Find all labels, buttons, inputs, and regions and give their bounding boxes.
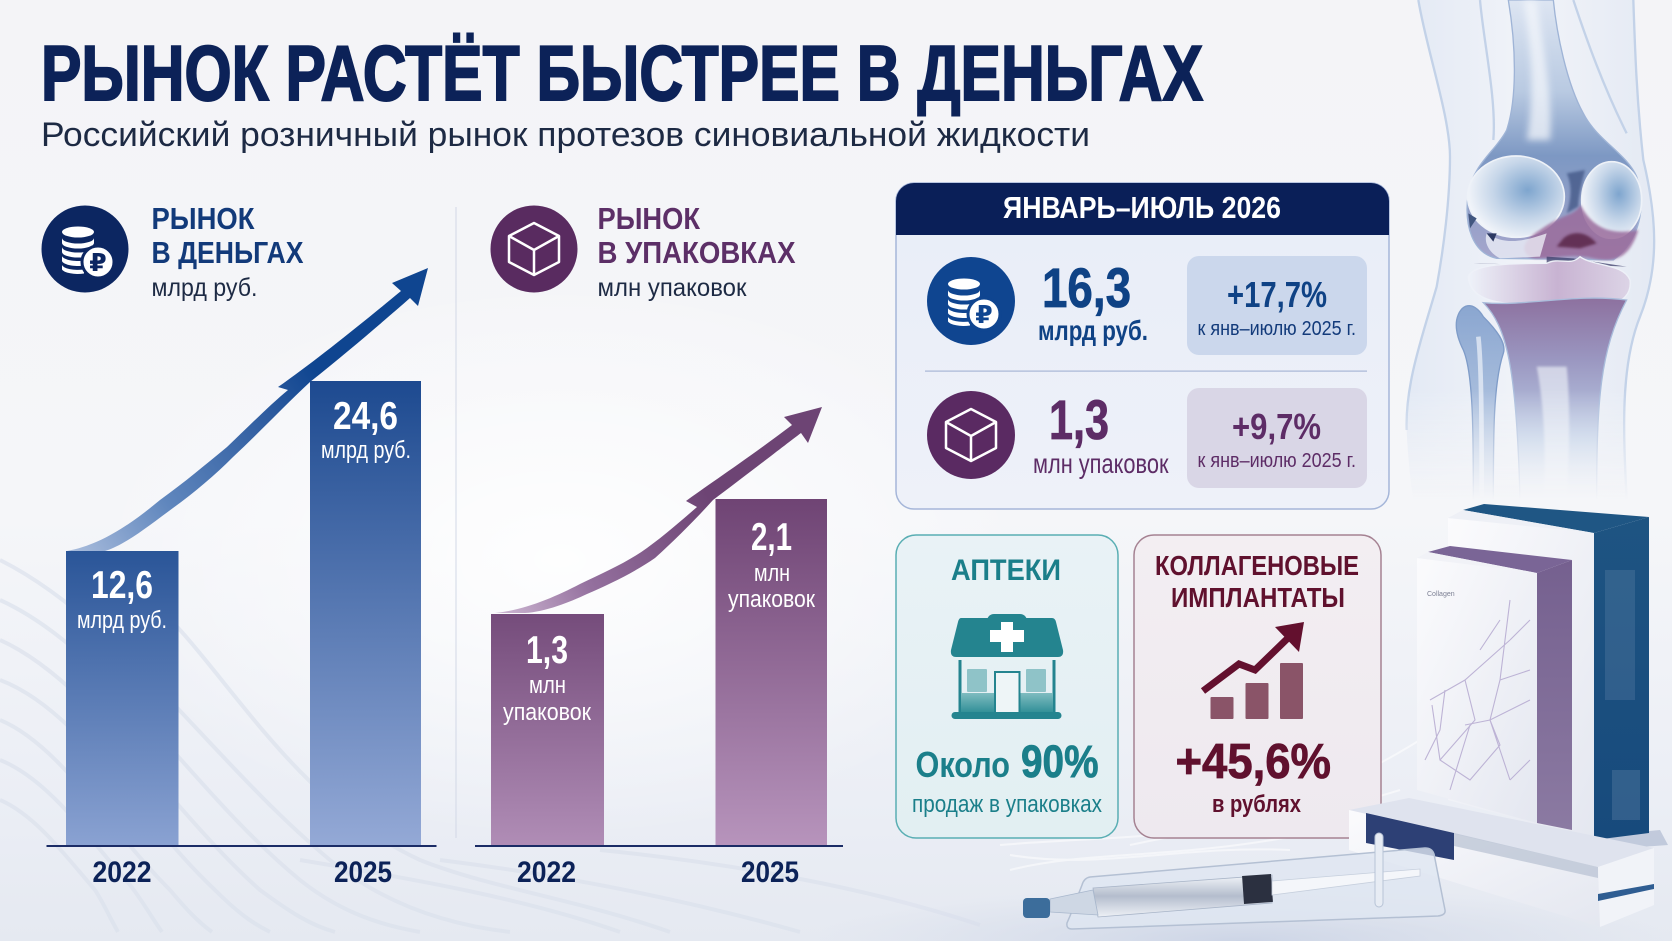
- panel: money market chart: [42, 201, 436, 889]
- axis: money: [46, 845, 436, 847]
- bar: 2025 money: млрд руб.: [321, 437, 411, 464]
- purple box: [1417, 546, 1572, 830]
- bar: 2025 packages: упаковок: [728, 586, 815, 613]
- year labels: money: [92, 856, 392, 889]
- chart icon: rising bars and arrow: [1203, 622, 1304, 719]
- metric: 1.3 mln packages: 1,3: [1049, 388, 1109, 451]
- bar: 2022 packages: 1,3: [526, 629, 568, 672]
- axis: packages: [475, 845, 843, 847]
- blue box: [1448, 504, 1668, 850]
- bar: 2022 money: [66, 551, 178, 846]
- callout: +17.7%: +17,7%: [1227, 274, 1327, 315]
- metric: 1.3 mln packages: [1033, 388, 1169, 479]
- icon: coins and ruble: [927, 257, 1015, 345]
- heading: packages market: РЫНОК: [598, 201, 700, 236]
- bar: 2022 packages: млн: [529, 672, 566, 699]
- callout: +9.7%: [1187, 388, 1367, 488]
- panel: packages market chart: [475, 201, 843, 889]
- heading: money market: [152, 201, 304, 302]
- metric: 16.3 bn rub: 16,3: [1042, 256, 1131, 319]
- metric: about 90%: 90%: [1021, 736, 1098, 787]
- year labels: packages: 2025: [741, 856, 799, 889]
- callout: +9.7%: к янв–июлю 2025 г.: [1198, 450, 1356, 472]
- bar: 2022 packages: [491, 614, 604, 846]
- icon: box: [490, 206, 578, 292]
- year labels: packages: 2022: [517, 856, 576, 889]
- bar: 2022 money: млрд руб.: [77, 607, 167, 634]
- caption: in rubles: в рублях: [1212, 791, 1302, 818]
- metric: +45.6%: +45,6%: [1176, 735, 1331, 789]
- heading: money market: млрд руб.: [152, 274, 258, 302]
- illustration: product boxes and syringe: [1023, 504, 1668, 929]
- year labels: packages: [517, 856, 799, 889]
- heading: collagen implants: [1155, 550, 1359, 613]
- panel: January-July 2026: [896, 183, 1389, 509]
- heading: packages market: [598, 201, 796, 302]
- panel header: [896, 183, 1389, 235]
- arrow: money growth: [67, 268, 428, 551]
- callout: +17.7%: к янв–июлю 2025 г.: [1198, 318, 1356, 340]
- bar: 2025 packages: 2,1: [751, 516, 792, 559]
- year labels: money: 2025: [334, 856, 392, 889]
- panel: pharmacies: [896, 535, 1118, 838]
- lying box: [1349, 798, 1654, 927]
- callout: +9.7%: +9,7%: [1232, 406, 1321, 447]
- title: РЫНОК РАСТЁТ БЫСТРЕЕ В ДЕНЬГАХ: [41, 29, 1203, 117]
- heading: pharmacies: АПТЕКИ: [951, 554, 1061, 587]
- heading: money market: В ДЕНЬГАХ: [152, 235, 304, 270]
- heading: packages market: млн упаковок: [598, 274, 748, 302]
- purple box: Collagen: [1427, 591, 1455, 598]
- bar: 2025 money: 24,6: [333, 395, 398, 438]
- metric: 16.3 bn rub: [1038, 256, 1148, 346]
- panel: collagen implants: [1134, 535, 1381, 838]
- icon: coins and ruble: [42, 206, 128, 292]
- panel header: ЯНВАРЬ–ИЮЛЬ 2026: [1003, 190, 1281, 225]
- bar: 2025 money: [310, 381, 421, 846]
- heading: money market: РЫНОК: [152, 201, 255, 236]
- metric: 1.3 mln packages: млн упаковок: [1033, 448, 1169, 479]
- background: [0, 514, 1672, 941]
- subtitle: Российский розничный рынок протезов синовиальной жидкости: [41, 116, 1090, 154]
- callout: +17.7%: [1187, 256, 1367, 355]
- bar: 2025 packages: [716, 499, 827, 846]
- syringe in blister: [1023, 833, 1445, 929]
- icon: box: [927, 391, 1015, 479]
- bar: 2022 packages: упаковок: [503, 699, 591, 726]
- metric: about 90%: Около: [916, 744, 1010, 785]
- icon: coins and ruble: ₽: [975, 301, 993, 329]
- icon: pharmacy: [951, 614, 1063, 719]
- bar: 2022 money: 12,6: [91, 564, 153, 607]
- caption: sales in packages: продаж в упаковках: [912, 791, 1102, 818]
- metric: about 90%: [916, 736, 1098, 787]
- arrow: packages growth: [495, 407, 822, 613]
- heading: collagen implants: ИМПЛАНТАТЫ: [1171, 582, 1345, 613]
- illustration: knee joint: [1407, 0, 1654, 500]
- heading: packages market: В УПАКОВКАХ: [598, 235, 796, 270]
- heading: collagen implants: КОЛЛАГЕНОВЫЕ: [1155, 550, 1359, 581]
- metric: 16.3 bn rub: млрд руб.: [1038, 315, 1148, 346]
- year labels: money: 2022: [92, 856, 152, 889]
- icon: coins and ruble: ₽: [89, 249, 107, 277]
- bar: 2025 packages: млн: [754, 560, 790, 587]
